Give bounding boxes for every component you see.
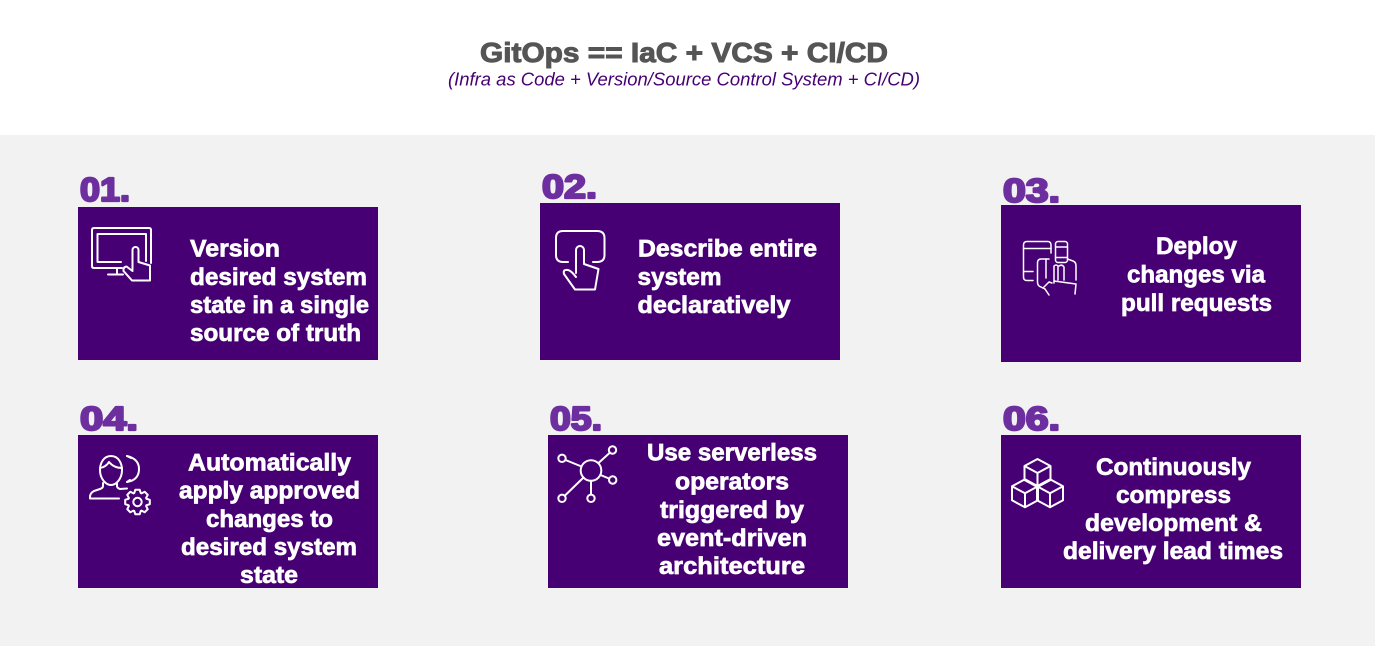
text 04: state <box>240 562 298 589</box>
card 01 <box>78 207 378 360</box>
text 02: declaratively <box>638 292 791 319</box>
text 05: Use serverless <box>647 440 817 466</box>
text 05: triggered by <box>660 497 805 524</box>
text 06: Continuously <box>1096 454 1252 481</box>
number 02: 02. <box>542 168 597 205</box>
panel: step 02 <box>540 168 840 360</box>
icon: touch monitor <box>92 228 151 280</box>
text 04: desired system <box>181 534 357 561</box>
text 01: state in a single <box>190 292 369 319</box>
title: GitOps == IaC + VCS + CI/CD <box>480 37 888 68</box>
panel: step 04 <box>78 400 378 589</box>
text 03: Deploy <box>1156 233 1238 260</box>
icon: devices and hand <box>1024 242 1076 295</box>
number 03: 03. <box>1003 172 1060 209</box>
text 04: Automatically <box>188 450 352 476</box>
panel: step 05 <box>548 400 848 588</box>
card 03 <box>1001 205 1301 362</box>
icon: network hub <box>558 446 616 502</box>
panel: step 01 <box>78 171 378 360</box>
text 04: changes to <box>206 506 333 533</box>
text 05: event-driven <box>657 525 807 552</box>
number 04: 04. <box>80 400 138 437</box>
icon: touch button <box>556 231 604 290</box>
text 04: apply approved <box>179 478 360 504</box>
text 04 <box>179 450 360 589</box>
title: (Infra as Code + Version/Source Control System + CI/CD) <box>448 70 920 90</box>
text 05: operators <box>675 468 789 496</box>
text 05: architecture <box>659 553 805 580</box>
number 05: 05. <box>550 400 602 437</box>
title <box>448 37 920 90</box>
text 01: desired system <box>190 264 367 291</box>
icon: stacked cubes <box>1012 459 1063 507</box>
background band <box>0 135 1375 646</box>
text 02: Describe entire <box>638 236 817 262</box>
text 01: source of truth <box>190 320 361 347</box>
text 02 <box>638 236 817 319</box>
panel: step 06 <box>1001 400 1301 588</box>
card 05 <box>548 435 848 588</box>
number 06: 06. <box>1003 400 1060 437</box>
text 05 <box>647 440 817 580</box>
text 01 <box>190 236 369 347</box>
text 06: delivery lead times <box>1063 538 1283 565</box>
icon: person with gear <box>90 456 150 514</box>
text 03: changes via <box>1127 262 1266 288</box>
text 01: Version <box>190 236 280 262</box>
panel: step 03 <box>1001 172 1301 362</box>
text 06: development & <box>1085 510 1262 537</box>
card 04 <box>78 435 378 588</box>
text 06 <box>1063 454 1283 565</box>
number 01: 01. <box>80 171 130 208</box>
card 02 <box>540 203 840 360</box>
text 03: pull requests <box>1121 290 1272 317</box>
text 02: system <box>638 264 722 291</box>
text 03 <box>1121 233 1272 317</box>
text 06: compress <box>1116 482 1231 509</box>
card 06 <box>1001 435 1301 588</box>
